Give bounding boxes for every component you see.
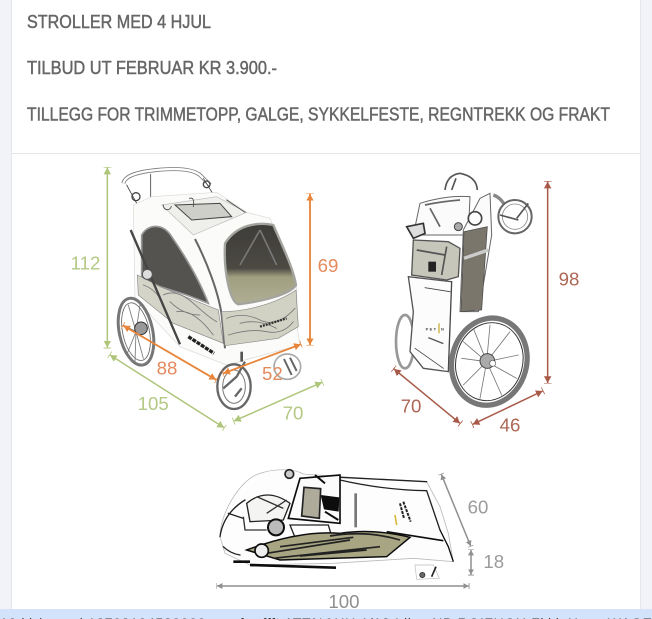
- dimension 69: 69: [318, 255, 338, 276]
- heading: stroller: STROLLER MED 4 HJUL: [27, 12, 211, 32]
- dimension 70: [234, 382, 322, 424]
- dimension 70 side: 70: [401, 396, 421, 417]
- dimension 46: 46: [500, 414, 520, 435]
- dimension 112: 112: [71, 253, 100, 274]
- dimension 88: [123, 326, 216, 380]
- dimension 100: 100: [328, 591, 359, 612]
- dimension 46: [473, 391, 543, 435]
- dimension 52: [223, 344, 301, 384]
- dimension 88: 88: [157, 357, 177, 378]
- diagram: stroller unfolded: [71, 168, 338, 428]
- dimension 70 side: [394, 369, 460, 423]
- diagram: stroller folded flat: [217, 470, 504, 612]
- heading text block: [27, 12, 610, 124]
- dimension 105: 105: [138, 393, 169, 414]
- dimension 60: 60: [468, 497, 488, 518]
- dimension 18: 18: [483, 551, 504, 572]
- folded upright drawing: PET: [426, 326, 437, 331]
- bottom status bar: [0, 609, 652, 619]
- folded upright drawing: N: [441, 326, 444, 331]
- dimension 60: [441, 474, 488, 546]
- dimension 105: [110, 355, 224, 428]
- diagram: stroller folded upright: [394, 173, 579, 435]
- dimension 18: [471, 550, 504, 575]
- folded flat drawing: [220, 470, 453, 579]
- folded upright drawing: [396, 173, 537, 414]
- stroller drawing: [113, 169, 301, 409]
- dimension 70: 70: [283, 403, 303, 424]
- divider: [12, 153, 640, 154]
- heading: offer price: TILBUD UT FEBRUAR KR 3.900.-: [27, 58, 277, 78]
- dimension 98: 98: [559, 269, 579, 290]
- dimension 52: 52: [262, 363, 283, 384]
